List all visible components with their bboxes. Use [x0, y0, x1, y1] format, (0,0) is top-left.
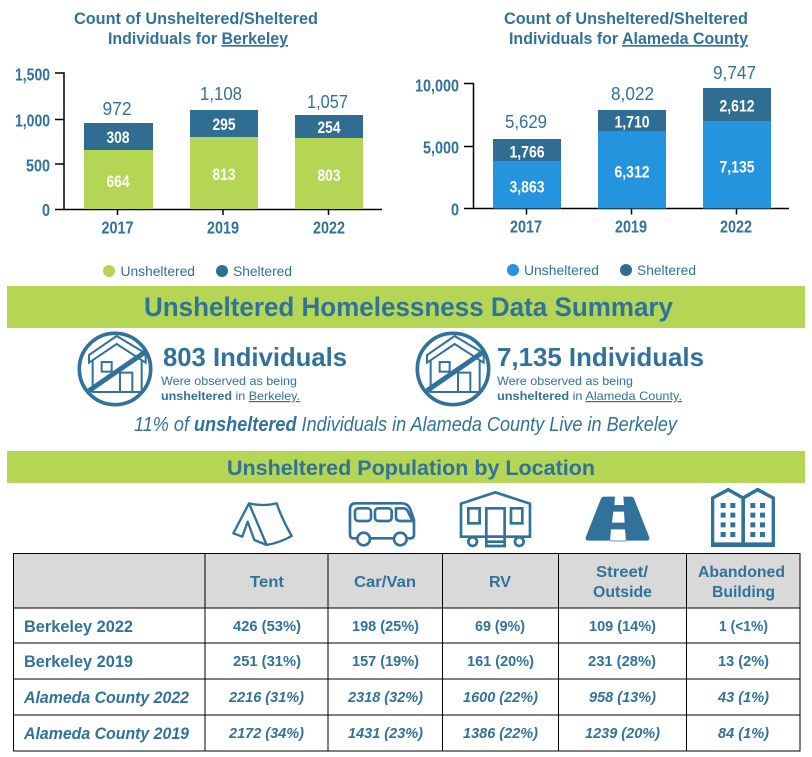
bar: Berkeley 2019: [190, 84, 258, 209]
row: Alameda County 2019: 1386 (22%): [463, 726, 538, 742]
heading: Alameda County chart title: [504, 10, 749, 48]
table header row: [14, 554, 800, 608]
chart axes: [464, 84, 789, 214]
bar: Berkeley 2017: [84, 99, 153, 209]
x axis labels: 2017: [102, 218, 134, 238]
x axis labels: 2022: [720, 216, 752, 236]
stat description: Berkeley: [161, 374, 300, 403]
row: Berkeley 2019: 161 (20%): [467, 654, 534, 670]
icon: tent: [233, 503, 292, 545]
bar: Alameda County 2022: [703, 63, 771, 208]
bar: Berkeley 2019: 1,108: [200, 84, 242, 104]
y axis labels: 5,000: [423, 138, 459, 158]
bar: Alameda County 2019: 8,022: [611, 84, 654, 104]
row: Alameda County 2022: Alameda County 2022: [23, 688, 189, 707]
banner: data summary heading: Unsheltered Homelessness Data Summary: [144, 292, 673, 322]
bar: Berkeley 2022: 254: [318, 119, 341, 137]
stat description: Alameda County: unsheltered in Alameda County.: [497, 389, 682, 403]
bar: Alameda County 2017: [493, 112, 561, 208]
icon: abandoned building: [711, 488, 775, 547]
panel: Alameda County summary stat: [417, 333, 704, 405]
legend: Unsheltered: [120, 263, 195, 279]
bar: Berkeley 2017: 664: [106, 173, 130, 191]
callout: share living in Berkeley: 11% of unsheltered Individuals in Alameda County Live in Berkeley: [134, 414, 678, 436]
bar: Alameda County 2019: [598, 84, 666, 208]
row: Berkeley 2022: 69 (9%): [475, 619, 525, 635]
row: Berkeley 2022: 1 (<1%): [719, 619, 768, 635]
x axis labels: 2019: [615, 216, 647, 236]
row: Alameda County 2022: 2318 (32%): [347, 690, 423, 706]
bar: Berkeley 2022: 803: [318, 167, 340, 185]
heading: Berkeley chart title: Count of Unsheltered/Sheltered: [74, 10, 318, 28]
panel: Berkeley stacked bar chart: [15, 10, 382, 279]
x axis labels: [102, 218, 345, 238]
bar: Alameda County 2017: 1,766: [510, 144, 544, 162]
row: Berkeley 2022: [24, 617, 768, 636]
y axis labels: 10,000: [415, 76, 459, 96]
panel: Alameda County stacked bar chart: [415, 10, 789, 278]
legend: [103, 263, 292, 279]
y axis labels: [15, 64, 50, 220]
banner: population by location heading: [7, 451, 805, 483]
row: Alameda County 2019: 1431 (23%): [348, 726, 423, 742]
legend: Unsheltered: [524, 262, 599, 278]
row: Berkeley 2019: Berkeley 2019: [24, 652, 133, 671]
row: Alameda County 2019: 2172 (34%): [228, 726, 304, 742]
legend: Sheltered: [233, 263, 292, 279]
bar: Berkeley 2019: 295: [212, 116, 236, 134]
bar: Berkeley 2022: 1,057: [307, 92, 348, 112]
stat description: Berkeley: Were observed as being: [161, 374, 297, 388]
row: Alameda County 2019: 1239 (20%): [585, 726, 660, 742]
stat: 7,135 individuals: 7,135 Individuals: [497, 342, 704, 372]
legend: Sheltered: [637, 262, 696, 278]
bar: Alameda County 2019: 1,710: [614, 114, 650, 132]
heading: Alameda County chart title: Individuals for Alameda County: [509, 30, 749, 48]
stat description: Alameda County: [497, 374, 682, 403]
bar: Alameda County 2017: 3,863: [510, 178, 544, 196]
bar: Alameda County 2022: 9,747: [713, 63, 756, 83]
row: Berkeley 2019: 157 (19%): [352, 654, 419, 670]
row: Berkeley 2022: Berkeley 2022: [24, 617, 133, 636]
banner: data summary heading: [7, 286, 805, 328]
row: Berkeley 2019: 231 (28%): [588, 654, 656, 670]
row: Berkeley 2019: [24, 652, 769, 671]
y axis labels: 500: [26, 156, 50, 176]
x axis labels: [510, 216, 752, 236]
stat: 803 individuals: 803 Individuals: [163, 342, 347, 372]
row: Alameda County 2022: 1600 (22%): [463, 690, 538, 706]
table header row: Car/Van: [354, 574, 416, 591]
y axis labels: 0: [42, 200, 50, 220]
x axis labels: 2019: [207, 218, 239, 238]
row: Berkeley 2022: 426 (53%): [233, 619, 301, 635]
heading: Berkeley chart title: [74, 10, 318, 48]
bar: Alameda County 2022: 2,612: [720, 98, 754, 116]
row: Alameda County 2019: [23, 724, 769, 743]
bar: Alameda County 2022: 7,135: [720, 158, 754, 176]
table: unsheltered population by location: [14, 554, 800, 751]
table header row: Building: [712, 584, 775, 601]
bar: Berkeley 2019: 813: [212, 166, 236, 184]
heading: Alameda County chart title: Count of Unsheltered/Sheltered: [504, 10, 748, 28]
row: Alameda County 2019: Alameda County 2019: [23, 724, 189, 743]
table header row: RV: [489, 574, 511, 591]
icon: crossed-out house: [417, 333, 489, 405]
banner: population by location heading: Unsheltered Population by Location: [227, 457, 595, 480]
x axis labels: 2022: [313, 218, 345, 238]
icon: car or van: [350, 503, 414, 545]
row: Alameda County 2022: 2216 (31%): [228, 690, 304, 706]
y axis labels: 1,000: [15, 110, 50, 130]
table header row: Street/: [596, 564, 649, 581]
stat description: Berkeley: unsheltered in Berkeley.: [161, 389, 300, 403]
row: Alameda County 2022: 43 (1%): [717, 690, 769, 706]
legend: [507, 262, 696, 278]
y axis labels: 1,500: [15, 64, 50, 84]
row: Berkeley 2019: 13 (2%): [718, 654, 769, 670]
row: Alameda County 2022: 958 (13%): [589, 690, 656, 706]
bar: Berkeley 2017: 308: [106, 129, 130, 147]
row: Berkeley 2019: 251 (31%): [233, 654, 301, 670]
heading: Berkeley chart title: Individuals for Berkeley: [108, 30, 289, 48]
table header row: Abandoned: [698, 564, 785, 581]
row: Berkeley 2022: 109 (14%): [589, 619, 656, 635]
row: Alameda County 2022: [23, 688, 769, 707]
row: Berkeley 2022: 198 (25%): [352, 619, 419, 635]
bar: Alameda County 2019: 6,312: [614, 164, 650, 182]
bar: Berkeley 2022: [295, 92, 363, 209]
x axis labels: 2017: [510, 216, 542, 236]
bar: Alameda County 2017: 5,629: [505, 112, 547, 132]
chart axes: [55, 73, 382, 215]
row: Alameda County 2019: 84 (1%): [718, 726, 769, 742]
y axis labels: 0: [451, 200, 459, 220]
y axis labels: [415, 76, 459, 220]
icon: crossed-out house: [79, 333, 151, 405]
icon: RV: [461, 492, 530, 546]
icon: street or road: [586, 497, 649, 541]
table header row: Tent: [250, 574, 285, 591]
table header row: Outside: [593, 584, 652, 601]
panel: Berkeley summary stat: [79, 333, 347, 405]
stat description: Alameda County: Were observed as being: [497, 374, 633, 388]
bar: Berkeley 2017: 972: [102, 99, 132, 119]
